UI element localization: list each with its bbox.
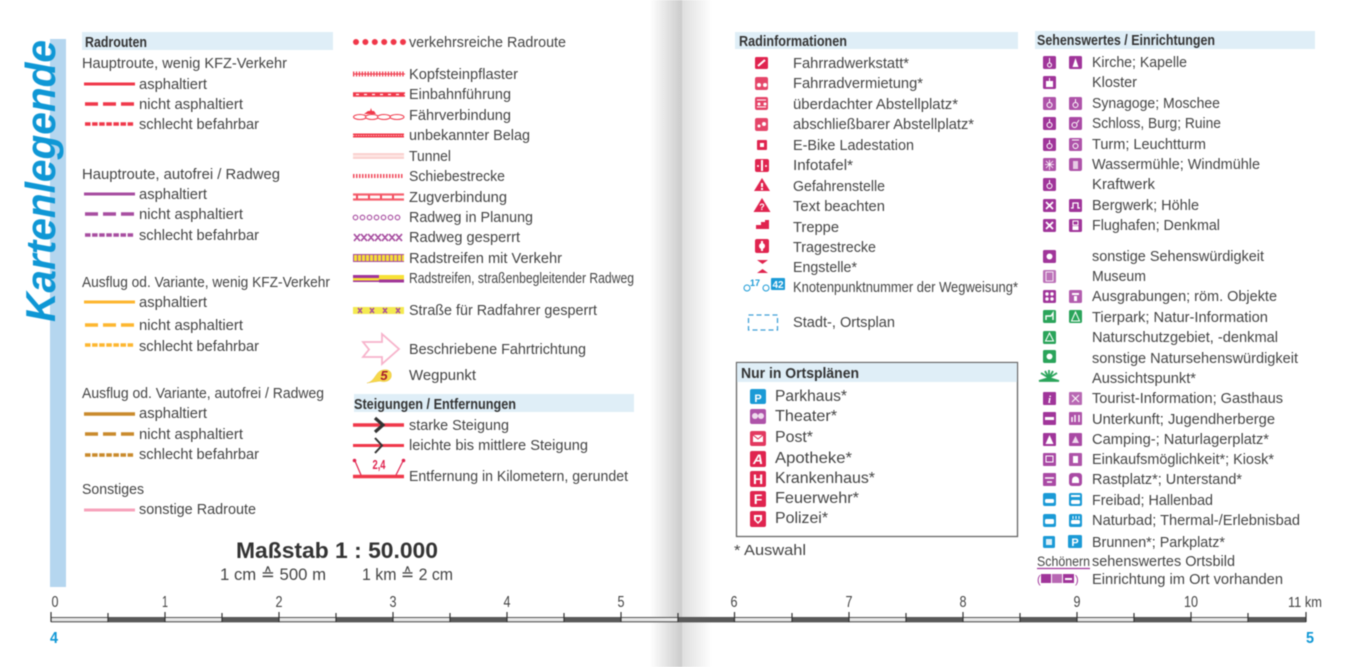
- row: sonstige Natursehenswürdigkeit: sonstige Natursehenswürdigkeit: [1092, 350, 1299, 367]
- row: Beschriebene Fahrtrichtung with arrow: [363, 334, 586, 364]
- page number 4: 4: [50, 630, 58, 647]
- heading: Nur in Ortsplänen: Nur in Ortsplänen: [741, 365, 859, 382]
- row: Text beachten: ?: [759, 202, 765, 212]
- page number 5: 5: [1306, 630, 1314, 647]
- scale numbers: 8: [960, 594, 966, 611]
- row: Engstelle: [757, 259, 857, 276]
- row: Polizei: Polizei*: [775, 510, 828, 527]
- scale numbers: [52, 594, 1322, 611]
- row: Ausgrabungen; röm. Objekte: Ausgrabungen; röm. Objekte: [1092, 288, 1277, 305]
- group: Sonstiges: [82, 481, 256, 518]
- scale numbers: 2: [276, 594, 282, 611]
- row: Bergwerk; Höhle: [1043, 197, 1199, 214]
- row: Tourist-Information; Gasthaus: i: [1048, 394, 1052, 406]
- row: Turm; Leuchtturm: Turm; Leuchtturm: [1092, 136, 1206, 153]
- row: Wegpunkt with marker: 5: [380, 368, 388, 383]
- panel: Nur in Ortsplänen: [736, 362, 1018, 536]
- row: Einkaufsmöglichkeit; Kiosk: Einkaufsmöglichkeit*; Kiosk*: [1092, 451, 1274, 468]
- row: Kraftwerk: Kraftwerk: [1092, 176, 1155, 193]
- row: Tragestrecke: [755, 239, 876, 256]
- panel: Radinformationen: [735, 32, 1018, 331]
- row: Theater: Theater*: [775, 408, 837, 425]
- scale numbers: 7: [846, 594, 852, 611]
- group: Hauptroute, autofrei / Radweg: Hauptroute, autofrei / Radweg: [82, 166, 280, 183]
- row: Wegpunkt with marker: Wegpunkt: [409, 367, 477, 384]
- row: Radweg in Planung: [353, 209, 533, 226]
- row: Tragestrecke: Tragestrecke: [793, 239, 876, 256]
- row: Tourist-Information; Gasthaus: Tourist-Information; Gasthaus: [1092, 390, 1283, 407]
- row: Fährverbindung: [354, 107, 511, 124]
- group: Hauptroute, wenig KFZ-Verkehr: schlecht befahrbar: [139, 116, 259, 133]
- row: Kirche; Kapelle: Kirche; Kapelle: [1092, 54, 1187, 71]
- row: Rastplatz; Unterstand: Rastplatz*; Unterstand*: [1092, 471, 1242, 488]
- scale numbers: 3: [390, 594, 396, 611]
- scale numbers: 10: [1184, 594, 1198, 611]
- row: abschließbarer Abstellplatz: abschließbarer Abstellplatz*: [793, 116, 974, 133]
- scale numbers: 4: [504, 594, 511, 611]
- heading: Steigungen / Entfernungen: [354, 394, 634, 413]
- group: Ausflug od. Variante, autofrei / Radweg: [82, 385, 324, 463]
- row: starke Steigung: [353, 417, 509, 434]
- group: Sonstiges: Sonstiges: [82, 481, 144, 498]
- row: verkehrsreiche Radroute: verkehrsreiche Radroute: [409, 34, 566, 51]
- row: Infotafel: Infotafel*: [793, 157, 853, 174]
- row: Knotenpunktnummer der Wegweisung: 17: [750, 278, 760, 288]
- row: Post: Post*: [775, 429, 813, 446]
- scale numbers: 6: [730, 594, 738, 611]
- row: Radweg gesperrt: Radweg gesperrt: [409, 229, 521, 246]
- row: Feuerwehr: Feuerwehr*: [775, 490, 859, 507]
- group: Ausflug od. Variante, wenig KFZ-Verkehr: nicht asphaltiert: [139, 317, 244, 334]
- row: Parkhaus: P: [754, 393, 762, 405]
- row: Tierpark; Natur-Information: Tierpark; Natur-Information: [1092, 309, 1268, 326]
- row: Fährverbindung: Fährverbindung: [409, 107, 511, 124]
- page gutter shadow: [650, 0, 712, 667]
- row: starke Steigung: starke Steigung: [409, 417, 509, 434]
- row: Synagoge; Moschee: [1043, 95, 1220, 112]
- row: Schloss, Burg; Ruine: Schloss, Burg; Ruine: [1092, 115, 1221, 132]
- group: Hauptroute, wenig KFZ-Verkehr: Hauptroute, wenig KFZ-Verkehr: [82, 55, 287, 72]
- group: Ausflug od. Variante, autofrei / Radweg: nicht asphaltiert: [139, 426, 244, 443]
- group: Hauptroute, wenig KFZ-Verkehr: asphaltiert: [139, 76, 208, 93]
- row: Entfernung in Kilometern, gerundet: [353, 457, 629, 485]
- group: Hauptroute, autofrei / Radweg: asphaltiert: [139, 186, 208, 203]
- row: Museum: Museum: [1092, 268, 1146, 285]
- row: Schiebestrecke: Schiebestrecke: [409, 168, 505, 185]
- panel: Radrouten: [82, 32, 333, 518]
- group: Ausflug od. Variante, wenig KFZ-Verkehr: [82, 274, 330, 355]
- row: Polizei: [750, 510, 828, 527]
- scale numbers: 11 km: [1288, 594, 1322, 611]
- row: Apotheke: A: [752, 451, 763, 467]
- row: Parkhaus: Parkhaus*: [775, 388, 847, 405]
- row: Treppe: Treppe: [793, 219, 839, 236]
- row: Text beachten: [754, 198, 885, 215]
- row: Krankenhaus: Krankenhaus*: [775, 470, 875, 487]
- row: Unterkunft; Jugendherberge: Unterkunft; Jugendherberge: [1092, 411, 1275, 428]
- row: Kloster: Kloster: [1092, 74, 1137, 91]
- row: Stadt-, Ortsplan: [748, 314, 895, 331]
- row: Krankenhaus: H: [753, 471, 763, 487]
- row: Camping-; Naturlagerplatz: Camping-; Naturlagerplatz*: [1092, 431, 1269, 448]
- row: Radstreifen, straßenbegleitender Radweg: [353, 270, 634, 287]
- panel: Steigungen / Entfernungen: [353, 394, 634, 485]
- group: Hauptroute, wenig KFZ-Verkehr: [82, 55, 287, 133]
- scale bar: [51, 594, 1322, 622]
- scale numbers: 1: [162, 594, 168, 611]
- row: Kirche; Kapelle: [1043, 54, 1187, 71]
- row: Knotenpunktnummer der Wegweisung: Knotenpunktnummer der Wegweisung*: [793, 279, 1018, 296]
- row: Naturschutzgebiet, -denkmal: Naturschutzgebiet, -denkmal: [1092, 329, 1278, 346]
- row: Brunnen; Parkplatz: Brunnen*; Parkplatz*: [1092, 534, 1225, 551]
- row: Kopfsteinpflaster: Kopfsteinpflaster: [409, 66, 518, 83]
- heading: Radinformationen: [735, 32, 1018, 50]
- row: Einrichtung im Ort vorhanden: (: [1037, 574, 1041, 586]
- row: Freibad; Hallenbad: [1043, 492, 1213, 509]
- group: Ausflug od. Variante, autofrei / Radweg: Ausflug od. Variante, autofrei / Radweg: [82, 385, 324, 402]
- row: Einrichtung im Ort vorhanden: Einrichtung im Ort vorhanden: [1092, 571, 1283, 588]
- row: Gefahrenstelle: Gefahrenstelle: [793, 178, 885, 195]
- row: Infotafel: [755, 157, 853, 174]
- row: Aussichtspunkt: [1039, 370, 1196, 387]
- heading: Sehenswertes / Einrichtungen: Sehenswertes / Einrichtungen: [1037, 32, 1215, 49]
- heading: Radrouten: Radrouten: [85, 34, 147, 51]
- row: Zugverbindung: Zugverbindung: [409, 189, 507, 206]
- row: Radweg in Planung: Radweg in Planung: [409, 209, 533, 226]
- row: Knotenpunktnummer der Wegweisung: [744, 278, 1018, 296]
- row: Schloss, Burg; Ruine: [1043, 115, 1221, 132]
- row: Radweg gesperrt: [354, 229, 521, 246]
- row: Fahrradvermietung: Fahrradvermietung*: [793, 75, 923, 92]
- scale heading: Maßstab 1 : 50.000: 1 km ≙ 2 cm: [362, 565, 453, 584]
- heading: Radrouten: [82, 32, 333, 51]
- row: Kraftwerk: [1043, 176, 1155, 193]
- row: Text beachten: Text beachten: [793, 198, 885, 215]
- row: Entfernung in Kilometern, gerundet: Entfernung in Kilometern, gerundet: [409, 468, 629, 485]
- row: Aussichtspunkt: Aussichtspunkt*: [1092, 370, 1196, 387]
- row: Tunnel: Tunnel: [409, 148, 451, 165]
- row: Einrichtung im Ort vorhanden: ): [1075, 574, 1079, 586]
- row: Kloster: [1043, 74, 1137, 91]
- scale numbers: 0: [52, 594, 59, 611]
- row: Einbahnführung: Einbahnführung: [409, 86, 511, 103]
- row: E-Bike Ladestation: E-Bike Ladestation: [793, 137, 914, 154]
- row: Brunnen; Parkplatz: P: [1071, 537, 1079, 549]
- row: Beschriebene Fahrtrichtung with arrow: Beschriebene Fahrtrichtung: [409, 341, 586, 358]
- row: Post: [750, 429, 813, 446]
- scale numbers: 5: [618, 594, 624, 611]
- group: Ausflug od. Variante, autofrei / Radweg: schlecht befahrbar: [139, 446, 259, 463]
- row: Naturbad; Thermal-/Erlebnisbad: Naturbad; Thermal-/Erlebnisbad: [1092, 512, 1300, 529]
- scale numbers: 9: [1074, 594, 1080, 611]
- scale heading: Maßstab 1 : 50.000: [220, 538, 453, 584]
- row: überdachter Abstellplatz: überdachter Abstellplatz*: [793, 96, 958, 113]
- heading: Steigungen / Entfernungen: Steigungen / Entfernungen: [354, 396, 516, 413]
- row: Radstreifen, straßenbegleitender Radweg: Radstreifen, straßenbegleitender Radweg: [409, 270, 634, 287]
- title: Kartenlegende with blue side bar: Kartenlegende: [17, 40, 64, 322]
- panel: special route types: [353, 34, 634, 384]
- row: Knotenpunktnummer der Wegweisung: 42: [772, 280, 784, 291]
- row: sonstige Sehenswürdigkeit: sonstige Sehenswürdigkeit: [1092, 248, 1265, 265]
- row: Museum: [1043, 268, 1146, 285]
- row: Fahrradwerkstatt: Fahrradwerkstatt*: [793, 55, 909, 72]
- row: sehenswertes Ortsbild: sehenswertes Ortsbild: [1092, 553, 1235, 570]
- row: Entfernung in Kilometern, gerundet: 2,4: [372, 457, 386, 472]
- group: Ausflug od. Variante, autofrei / Radweg: asphaltiert: [139, 405, 208, 422]
- scale heading: Maßstab 1 : 50.000: 1 cm ≙ 500 m: [220, 565, 326, 584]
- group: Ausflug od. Variante, wenig KFZ-Verkehr: Ausflug od. Variante, wenig KFZ-Verkehr: [82, 274, 330, 291]
- row: Stadt-, Ortsplan: Stadt-, Ortsplan: [793, 314, 895, 331]
- row: Engstelle: Engstelle*: [793, 259, 857, 276]
- row: leichte bis mittlere Steigung: leichte bis mittlere Steigung: [409, 437, 588, 454]
- row: Wegpunkt with marker: [367, 367, 477, 384]
- row: Flughafen; Denkmal: [1043, 217, 1220, 234]
- row: Wassermühle; Windmühle: Wassermühle; Windmühle: [1092, 156, 1260, 173]
- row: Flughafen; Denkmal: Flughafen; Denkmal: [1092, 217, 1220, 234]
- row: Treppe: [756, 219, 839, 236]
- row: Straße für Radfahrer gesperrt: Straße für Radfahrer gesperrt: [409, 302, 598, 319]
- row: Radstreifen mit Verkehr: Radstreifen mit Verkehr: [409, 250, 562, 267]
- row: Tunnel: [353, 148, 451, 165]
- row: Freibad; Hallenbad: Freibad; Hallenbad: [1092, 492, 1213, 509]
- row: Turm; Leuchtturm: [1043, 136, 1206, 153]
- group: Ausflug od. Variante, wenig KFZ-Verkehr: schlecht befahrbar: [139, 338, 259, 355]
- scale heading: Maßstab 1 : 50.000: Maßstab 1 : 50.000: [236, 538, 438, 563]
- row: unbekannter Belag: unbekannter Belag: [409, 127, 530, 144]
- group: Hauptroute, wenig KFZ-Verkehr: nicht asphaltiert: [139, 96, 244, 113]
- row: sehenswertes Ortsbild: Schönern: [1037, 553, 1090, 569]
- group: Sonstiges: sonstige Radroute: [139, 501, 256, 518]
- group: Ausflug od. Variante, wenig KFZ-Verkehr: asphaltiert: [139, 294, 208, 311]
- row: Apotheke: Apotheke*: [775, 450, 852, 467]
- row: Bergwerk; Höhle: Bergwerk; Höhle: [1092, 197, 1199, 214]
- title: Kartenlegende with blue side bar: [17, 39, 66, 587]
- heading: Radinformationen: Radinformationen: [739, 33, 847, 50]
- group: Hauptroute, autofrei / Radweg: schlecht befahrbar: [139, 227, 259, 244]
- panel: Sehenswertes / Einrichtungen: [1035, 31, 1315, 588]
- row: Gefahrenstelle: [754, 178, 885, 195]
- row: Synagoge; Moschee: Synagoge; Moschee: [1092, 95, 1220, 112]
- footnote: Auswahl: * Auswahl: [734, 542, 806, 559]
- row: Feuerwehr: F: [754, 491, 763, 507]
- heading: Nur in Ortsplänen: [737, 363, 1017, 382]
- group: Hauptroute, autofrei / Radweg: nicht asphaltiert: [139, 206, 244, 223]
- group: Hauptroute, autofrei / Radweg: [82, 166, 280, 244]
